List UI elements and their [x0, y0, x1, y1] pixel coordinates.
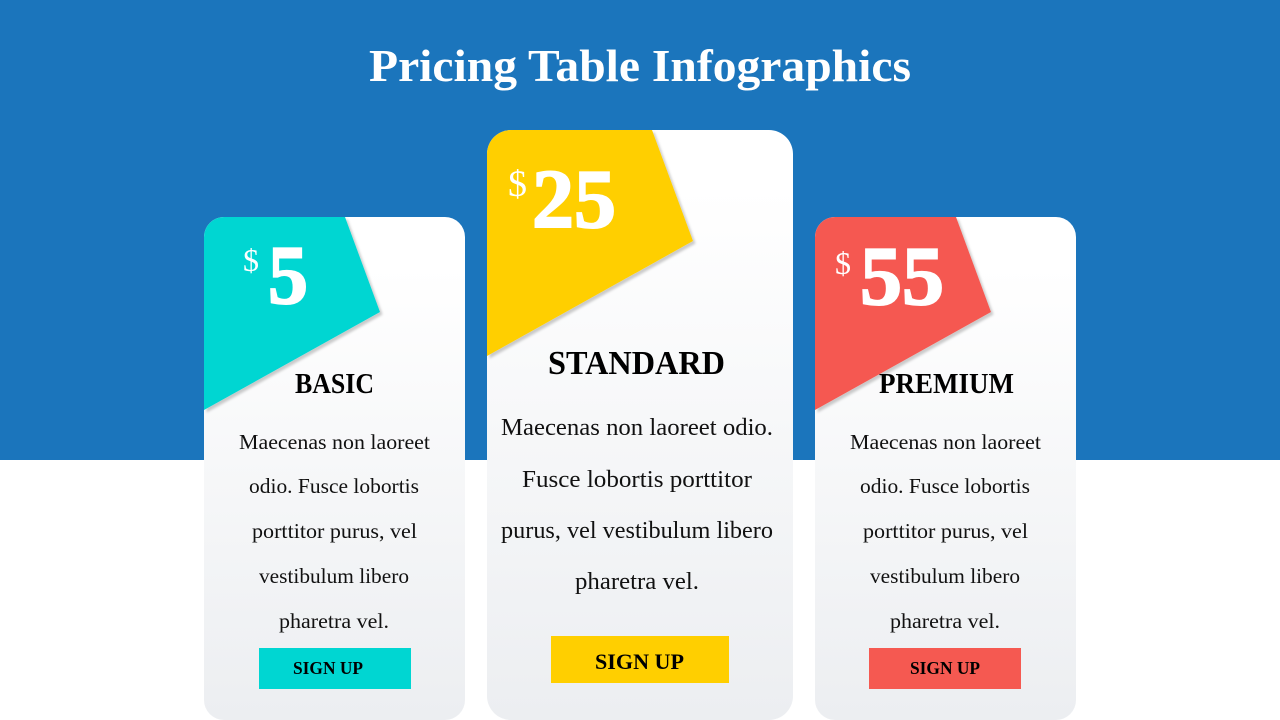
button: standard sign up — [551, 636, 729, 683]
description: premium: odio. Fusce lobortis — [860, 474, 1030, 498]
price: $25: $ — [508, 164, 527, 205]
button: basic sign up — [259, 648, 411, 689]
description: premium: Maecenas non laoreet — [850, 430, 1041, 454]
price tag: standard — [487, 130, 693, 356]
description: basic — [239, 430, 430, 633]
card background: basic — [204, 217, 465, 720]
panel: standard plan — [487, 130, 793, 720]
description: premium: porttitor purus, vel — [863, 519, 1028, 543]
description: basic: porttitor purus, vel — [252, 519, 417, 543]
price: $5: 5 — [268, 229, 308, 322]
price: $55: 55 — [860, 230, 944, 323]
panel: basic plan — [204, 217, 465, 720]
price: $25: 25 — [532, 153, 616, 246]
price: $5 — [243, 229, 308, 322]
blue header background — [0, 0, 1280, 460]
description: basic: odio. Fusce lobortis — [249, 474, 419, 498]
description: standard: Maecenas non laoreet odio. — [501, 415, 773, 441]
button: basic sign up: SIGN UP — [293, 658, 363, 678]
description: standard: pharetra vel. — [575, 569, 699, 595]
description: premium: pharetra vel. — [890, 609, 1000, 633]
plan name: standard: STANDARD — [548, 345, 725, 382]
price: $5: $ — [243, 242, 259, 278]
description: standard: purus, vel vestibulum libero — [501, 518, 773, 544]
description: basic: vestibulum libero — [259, 564, 409, 588]
description: standard: Fusce lobortis porttitor — [522, 467, 752, 493]
plan name: basic: BASIC — [295, 369, 374, 400]
description: basic: Maecenas non laoreet — [239, 430, 430, 454]
button: standard sign up: SIGN UP — [595, 649, 684, 674]
card background: premium — [815, 217, 1076, 720]
description: premium — [850, 430, 1041, 633]
panel: premium plan — [815, 217, 1076, 720]
description: premium: vestibulum libero — [870, 564, 1020, 588]
plan name: premium: PREMIUM — [879, 369, 1014, 400]
card background: standard — [487, 130, 793, 720]
description: basic: pharetra vel. — [279, 609, 389, 633]
price: $55: $ — [835, 245, 851, 281]
price tag: premium — [815, 217, 991, 410]
description: standard — [501, 415, 773, 595]
title: Pricing Table Infographics — [369, 40, 911, 91]
button: premium sign up — [869, 648, 1021, 689]
button: premium sign up: SIGN UP — [910, 658, 980, 678]
price tag: basic — [204, 217, 380, 410]
